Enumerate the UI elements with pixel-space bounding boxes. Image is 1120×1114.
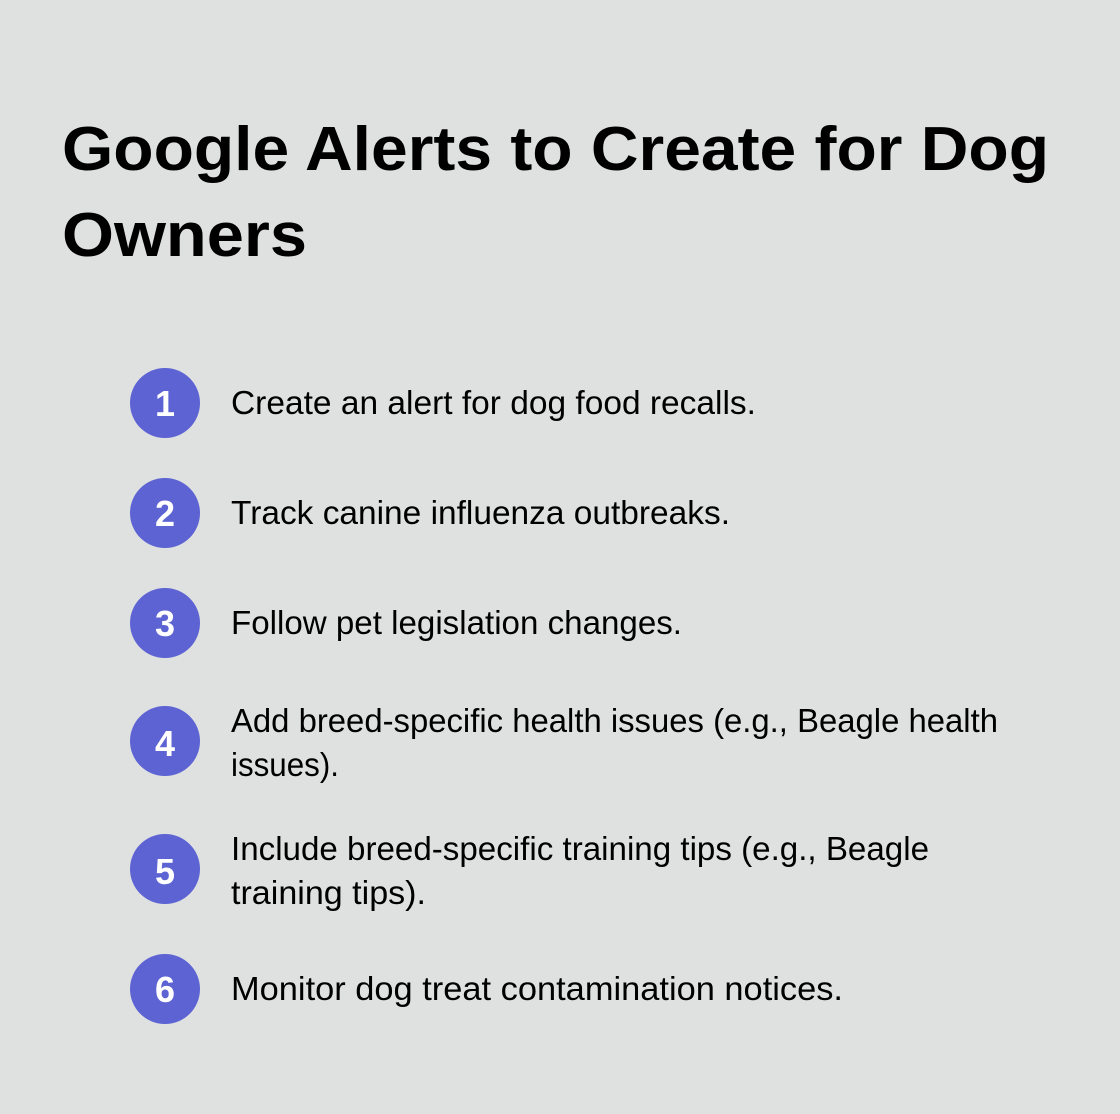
number badge 3 <box>130 588 200 658</box>
item text 2: Track canine influenza outbreaks. <box>231 494 730 531</box>
number badge 1: 1 <box>155 383 175 424</box>
number badge 4: 4 <box>155 723 175 764</box>
item text 1: Create an alert for dog food recalls. <box>231 384 756 421</box>
item text 5 <box>231 830 929 911</box>
list item 6 <box>130 954 843 1024</box>
title <box>62 115 1049 270</box>
number badge 2: 2 <box>155 493 175 534</box>
number badge 5: 5 <box>155 851 175 892</box>
list item 3 <box>130 588 682 658</box>
list item 5 <box>130 830 929 911</box>
number badge 6 <box>130 954 200 1024</box>
list item 1 <box>130 368 756 438</box>
number badge 6: 6 <box>155 969 175 1010</box>
number badge 4 <box>130 706 200 776</box>
number badge 3: 3 <box>155 603 175 644</box>
number badge 5 <box>130 834 200 904</box>
item text 6: Monitor dog treat contamination notices. <box>231 970 843 1007</box>
number badge 1 <box>130 368 200 438</box>
item text 5: Include breed-specific training tips (e.g., Beagle <box>231 830 929 867</box>
item text 4 <box>231 702 998 783</box>
list item 4 <box>130 702 998 783</box>
item text 3: Follow pet legislation changes. <box>231 604 682 641</box>
title: Google Alerts to Create for Dog <box>62 115 1049 184</box>
number badge 2 <box>130 478 200 548</box>
title: Owners <box>62 201 307 270</box>
item text 4: Add breed-specific health issues (e.g., Beagle health <box>231 702 998 739</box>
item text 5: training tips). <box>231 874 426 911</box>
list item 2 <box>130 478 730 548</box>
item text 4: issues). <box>231 746 339 783</box>
